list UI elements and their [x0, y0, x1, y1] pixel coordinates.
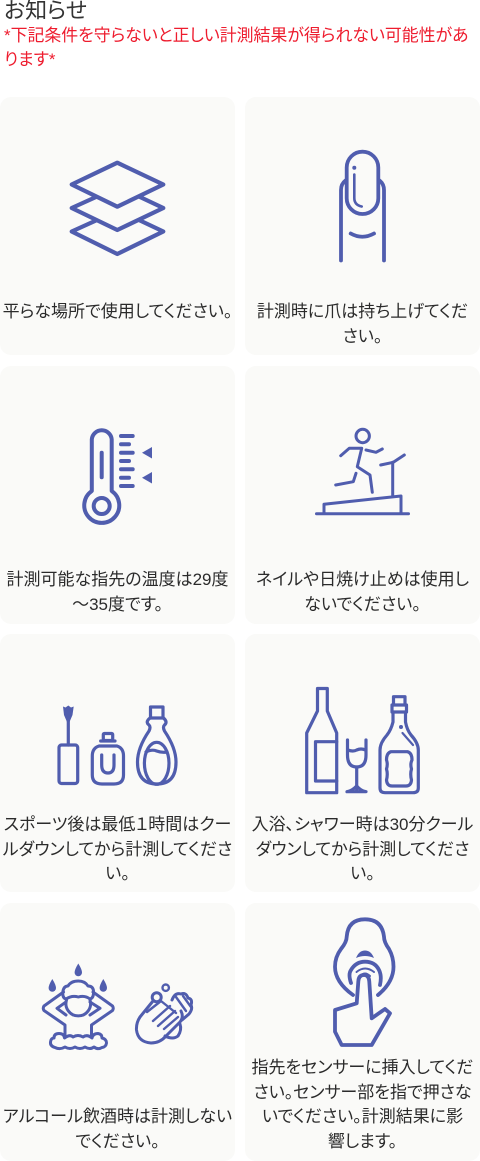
panel: after bath — [245, 634, 480, 892]
caption: さい。 — [343, 327, 382, 346]
caption: ないでください。 — [304, 595, 421, 614]
icon: hair and hand washing — [42, 964, 194, 1050]
panel: alcohol — [0, 903, 235, 1161]
caption — [3, 1107, 232, 1151]
caption: 平らな場所で使用してください。 — [3, 302, 232, 321]
caption: 計測時に爪は持ち上げてくだ — [257, 302, 468, 321]
warning note: *下記条件を守らないと正しい計測結果が得られない可能性があ — [4, 26, 468, 45]
caption: ネイルや日焼け止めは使用し — [256, 570, 469, 589]
warning note: ります* — [4, 50, 55, 69]
icon: treadmill runner — [315, 428, 410, 516]
icon: stacked layers — [70, 160, 166, 256]
caption: アルコール飲酒時は計測しない — [3, 1107, 232, 1126]
caption — [3, 815, 232, 883]
caption — [251, 1058, 474, 1151]
caption: ダウンしてから計測してくださ — [256, 840, 469, 859]
panel: after sports — [0, 634, 235, 892]
panel: lift nail — [245, 97, 480, 355]
caption: スポーツ後は最低１時間はクー — [4, 815, 231, 834]
caption: い。 — [105, 864, 130, 883]
caption: いでください。計測結果に影 — [262, 1107, 463, 1126]
panel: nail polish and sunscreen — [245, 366, 480, 624]
icon: finger on sensor — [333, 917, 396, 1047]
caption: 入浴、シャワー時は30分クール — [252, 815, 473, 834]
caption: さい。センサー部を指で押さな — [254, 1083, 472, 1102]
caption: 指先をセンサーに挿入してくだ — [251, 1058, 474, 1077]
caption: でください。 — [75, 1132, 160, 1151]
caption: ～35度です。 — [72, 595, 163, 614]
warning note — [4, 26, 468, 69]
caption — [257, 302, 468, 346]
icon: wine and whisky bottles — [305, 686, 420, 794]
icon: thermometer — [82, 428, 152, 525]
caption — [6, 570, 228, 614]
caption — [252, 815, 473, 883]
panel: temperature — [0, 366, 235, 624]
caption: ルダウンしてから計測してくださ — [3, 840, 232, 859]
caption — [256, 570, 469, 614]
panel: flat surface — [0, 97, 235, 355]
caption: 計測可能な指先の温度は29度 — [6, 570, 228, 589]
panel: sensor insertion — [245, 903, 480, 1161]
caption: 響します。 — [328, 1132, 397, 1151]
icon: fingernail — [339, 150, 386, 262]
caption: い。 — [350, 864, 375, 883]
icon: nail polish and bottles — [57, 705, 178, 786]
